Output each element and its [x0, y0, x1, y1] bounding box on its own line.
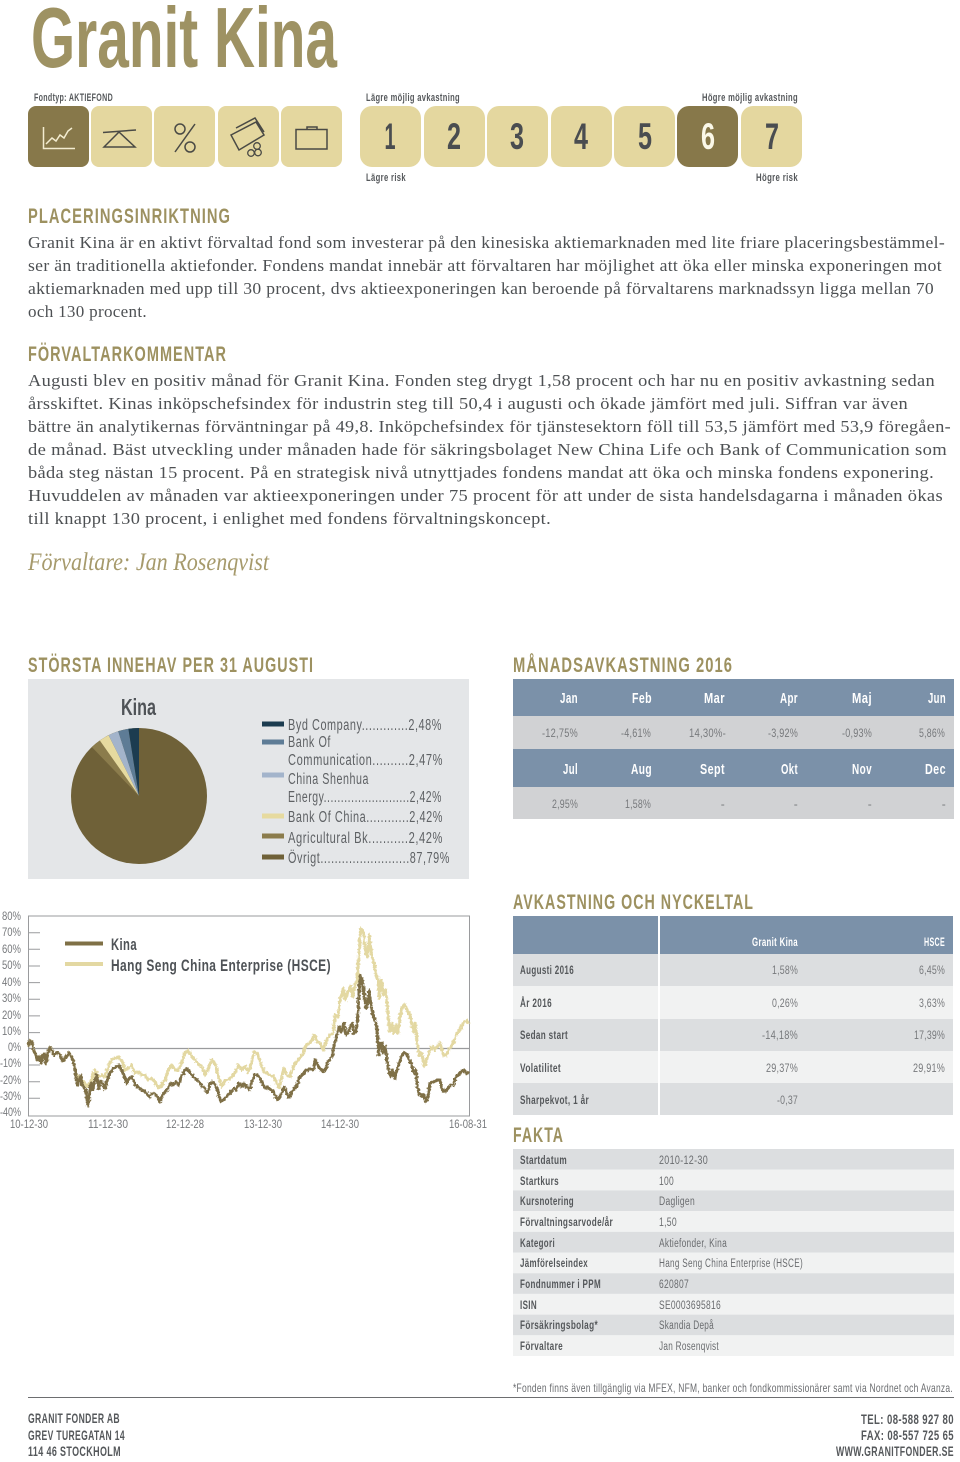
series: HSCE — [28, 928, 469, 1088]
table: fund facts: Startkurs — [520, 1176, 559, 1188]
chart axis labels: -30% — [0, 1089, 21, 1103]
table: monthly returns: 2,95% — [552, 797, 578, 811]
table: monthly returns: Dec — [925, 761, 946, 778]
table: returns and key figures: HSCE — [924, 937, 945, 949]
icon: percent tile — [154, 106, 215, 167]
table: returns and key figures: 29,37% — [766, 1061, 798, 1075]
heading: månadsavkastning: MÅNADSAVKASTNING 2016 — [513, 653, 733, 677]
table: monthly returns: 1,58% — [625, 797, 651, 811]
table: fund facts: ISIN — [520, 1300, 537, 1312]
text block: placeringsinriktning: ser än traditionella aktiefonder. Fondens mandat innebär att förvaltaren har möjlighet att öka eller minska exponeringen mot — [28, 256, 942, 275]
risk scale 1 to 7: 1 — [384, 116, 396, 157]
heading: fakta: FAKTA — [513, 1124, 564, 1147]
table: monthly returns: Sept — [700, 761, 725, 778]
chart legend — [65, 935, 331, 975]
pie legend: Bank Of China............2,42% — [288, 809, 443, 826]
table: fund facts: Aktiefonder, Kina — [659, 1238, 727, 1250]
chart axis labels: -10% — [0, 1056, 21, 1070]
table: fund facts: 620807 — [659, 1279, 689, 1291]
table: fund facts: Kursnotering — [520, 1196, 574, 1208]
risk scale labels bottom: Lägre risk — [366, 172, 406, 184]
footer: contact — [836, 1411, 954, 1459]
table: monthly returns — [513, 679, 954, 819]
table: monthly returns: -0,93% — [842, 726, 872, 740]
table: fund facts: 2010-12-30 — [659, 1155, 708, 1167]
table: fund facts: Förvaltare — [520, 1341, 563, 1353]
table: returns and key figures: Sedan start — [520, 1030, 568, 1042]
risk scale 1 to 7: 7 — [765, 116, 779, 157]
chart axis labels: 13-12-30 — [244, 1117, 282, 1131]
chart axis labels: 30% — [2, 991, 21, 1005]
table: monthly returns: Apr — [780, 690, 798, 707]
text block: förvaltarkommentar: årsskiftet. Kinas inköpschefsindex för industrin steg till 50,4 i augusti och ökade jämfört med juli. Siffran var även — [28, 394, 908, 413]
footer: address: GREV TUREGATAN 14 — [28, 1427, 125, 1443]
chart axis labels: 0% — [8, 1040, 21, 1054]
text block: placeringsinriktning: och 130 procent. — [28, 302, 147, 321]
table: returns and key figures: Augusti 2016 — [520, 965, 574, 977]
chart axis labels: 11-12-30 — [88, 1117, 128, 1131]
chart axis labels: 40% — [2, 975, 21, 989]
table: monthly returns: 5,86% — [919, 726, 945, 740]
pie legend: Bank Of — [288, 734, 331, 751]
footer: address: GRANIT FONDER AB — [28, 1410, 120, 1426]
table: monthly returns: Okt — [781, 761, 798, 778]
pie legend: Agricultural Bk...........2,42% — [288, 830, 443, 847]
icon: briefcase tile — [281, 106, 342, 167]
text block: förvaltarkommentar — [28, 371, 951, 528]
chart axis labels: 10-12-30 — [10, 1117, 48, 1131]
pie legend: Byd Company.............2,48% — [288, 717, 442, 734]
chart axis labels — [0, 909, 487, 1131]
table: monthly returns: - — [721, 797, 725, 811]
text block: förvaltarkommentar: Huvuddelen av månaden var aktieexponeringen under 75 procent för att under de sista handelsdagarna i månaden ökas — [28, 486, 943, 505]
pie legend: Communication..........2,47% — [288, 752, 443, 769]
chart axis labels: 14-12-30 — [321, 1117, 359, 1131]
risk scale 1 to 7 — [360, 106, 802, 167]
text block: förvaltarkommentar: till knappt 130 procent, i enlighet med fondens förvaltningskoncept. — [28, 509, 551, 528]
table: monthly returns: Jul — [563, 761, 578, 778]
table: fund facts: Hang Seng China Enterprise (HSCE) — [659, 1258, 803, 1270]
table: returns and key figures: 3,63% — [919, 996, 945, 1010]
table: returns and key figures: 17,39% — [914, 1028, 945, 1042]
table: fund facts: Försäkringsbolag* — [520, 1320, 598, 1332]
risk scale 1 to 7: 5 — [638, 116, 652, 157]
table: fund facts: Jan Rosenqvist — [659, 1341, 719, 1353]
table: monthly returns: Mar — [704, 690, 725, 707]
table: returns and key figures: 0,26% — [772, 996, 798, 1010]
risk scale labels top — [366, 92, 798, 104]
risk scale 1 to 7: 3 — [510, 116, 524, 157]
table: monthly returns: Nov — [852, 761, 872, 778]
chart axis labels: -20% — [0, 1073, 21, 1087]
table: fund facts: 100 — [659, 1176, 674, 1188]
text block: placeringsinriktning: Granit Kina är en aktivt förvaltad fond som investerar på den kinesiska aktiemarknaden med lite friare placeringsbestämmel- — [28, 233, 945, 252]
table: fund facts: SE0003695816 — [659, 1300, 721, 1312]
pie chart — [71, 728, 207, 864]
series: Kina — [28, 975, 469, 1106]
pie heading: Kina — [121, 694, 156, 720]
label: fund type: Fondtyp: AKTIEFOND — [34, 92, 113, 104]
chart axis labels: 70% — [2, 925, 21, 939]
table: monthly returns: - — [942, 797, 946, 811]
table: returns and key figures: 1,58% — [772, 963, 798, 977]
pie legend: Övrigt.........................87,79% — [288, 849, 450, 867]
chart axis labels: 80% — [2, 909, 21, 923]
risk scale labels top: Lägre möjlig avkastning — [366, 92, 460, 104]
text block: förvaltarkommentar: de månad. Bäst utveckling under månaden hade för säkringsbolaget New China Life och Bank of Communication som — [28, 440, 947, 459]
text block: förvaltarkommentar: bättre än analytikernas förväntningar på 49,8. Inköpchefsindex för tjänstesektorn föll till 53,5 jämfört med 53,9 föregåen- — [28, 417, 951, 436]
fund type icon tiles — [28, 106, 342, 167]
table: returns and key figures: Granit Kina — [752, 937, 798, 949]
table: fund facts: Förvaltningsarvode/år — [520, 1217, 613, 1229]
table: monthly returns: Jan — [560, 690, 578, 707]
table: fund facts: Fondnummer i PPM — [520, 1279, 601, 1291]
chart frame — [28, 916, 470, 1116]
table: monthly returns: -4,61% — [621, 726, 651, 740]
table: returns and key figures: 6,45% — [919, 963, 945, 977]
table: monthly returns: Feb — [632, 690, 652, 707]
table: fund facts: Startdatum — [520, 1155, 567, 1167]
panel: holdings pie chart — [28, 679, 469, 879]
footer: address — [28, 1410, 125, 1459]
risk scale labels bottom: Högre risk — [756, 172, 798, 184]
table: monthly returns: Maj — [852, 690, 872, 707]
table: returns and key figures — [513, 916, 953, 1115]
icon: wallet and coins tile — [218, 106, 279, 167]
table: fund facts — [513, 1149, 954, 1356]
risk scale 1 to 7: 2 — [447, 116, 461, 157]
footer: address: 114 46 STOCKHOLM — [28, 1443, 121, 1459]
risk scale 1 to 7: 6 — [701, 116, 715, 157]
table: returns and key figures: -14,18% — [762, 1028, 798, 1042]
chart axis labels: 20% — [2, 1008, 21, 1022]
fund manager signature: Förvaltare: Jan Rosenqvist — [27, 549, 270, 576]
chart axis labels: 10% — [2, 1024, 21, 1038]
heading: placeringsinriktning: PLACERINGSINRIKTNING — [28, 205, 231, 228]
table: returns and key figures: Sharpekvot, 1 år — [520, 1095, 589, 1107]
pie legend — [262, 717, 450, 867]
table: fund facts: Jämförelseindex — [520, 1258, 588, 1270]
chart axis labels: 50% — [2, 958, 21, 972]
table: fund facts: Skandia Depå — [659, 1320, 714, 1332]
table: returns and key figures: År 2016 — [520, 997, 552, 1010]
chart axis labels: -40% — [0, 1105, 21, 1119]
table: fund facts: 1,50 — [659, 1217, 677, 1229]
table: fund facts: Kategori — [520, 1238, 555, 1250]
text block: placeringsinriktning — [28, 233, 945, 321]
chart legend: Hang Seng China Enterprise (HSCE) — [111, 956, 331, 975]
table: fund facts: Dagligen — [659, 1196, 695, 1208]
heading: avkastning och nyckeltal: AVKASTNING OCH NYCKELTAL — [513, 891, 754, 914]
heading: största innehav: STÖRSTA INNEHAV PER 31 AUGUSTI — [28, 654, 314, 677]
risk scale labels bottom — [366, 172, 798, 184]
icon: equity chart tile — [28, 106, 89, 167]
chart axis labels: 12-12-28 — [166, 1117, 204, 1131]
table: monthly returns: -3,92% — [768, 726, 798, 740]
table: monthly returns: Jun — [928, 690, 946, 707]
icon: balance tile — [91, 106, 152, 167]
table: monthly returns: 14,30%- — [689, 726, 726, 740]
text block: placeringsinriktning: aktiemarknaden med upp till 30 procent, dvs aktieexponeringen kan beroende på förvaltarens marknadssyn ligga mellan 70 — [28, 279, 934, 298]
chart axis labels: 16-08-31 — [449, 1117, 487, 1131]
table: monthly returns: -12,75% — [542, 726, 578, 740]
text block: förvaltarkommentar: Augusti blev en positiv månad för Granit Kina. Fonden steg drygt 1,58 procent och har nu en positiv avkastning sedan — [28, 371, 935, 390]
table: returns and key figures: -0,37 — [777, 1093, 798, 1107]
chart axis labels: 60% — [2, 942, 21, 956]
text block: förvaltarkommentar: båda steg nästan 15 procent. På en strategisk nivå utnyttjades fondens mandat att öka och minska fondens exponering. — [28, 463, 934, 482]
table: returns and key figures: Volatilitet — [520, 1063, 561, 1075]
risk scale 1 to 7: 4 — [574, 116, 588, 157]
pie legend: China Shenhua — [288, 771, 369, 788]
line chart: fund vs index — [0, 909, 487, 1131]
table: monthly returns: - — [794, 797, 798, 811]
pie legend: Energy.........................2,42% — [288, 789, 442, 806]
heading: förvaltarkommentar: FÖRVALTARKOMMENTAR — [28, 343, 227, 366]
table: monthly returns: - — [868, 797, 872, 811]
table: monthly returns: Aug — [631, 761, 652, 778]
chart legend: Kina — [111, 935, 137, 954]
table: returns and key figures: 29,91% — [913, 1061, 945, 1075]
risk scale labels top: Högre möjlig avkastning — [702, 92, 798, 104]
